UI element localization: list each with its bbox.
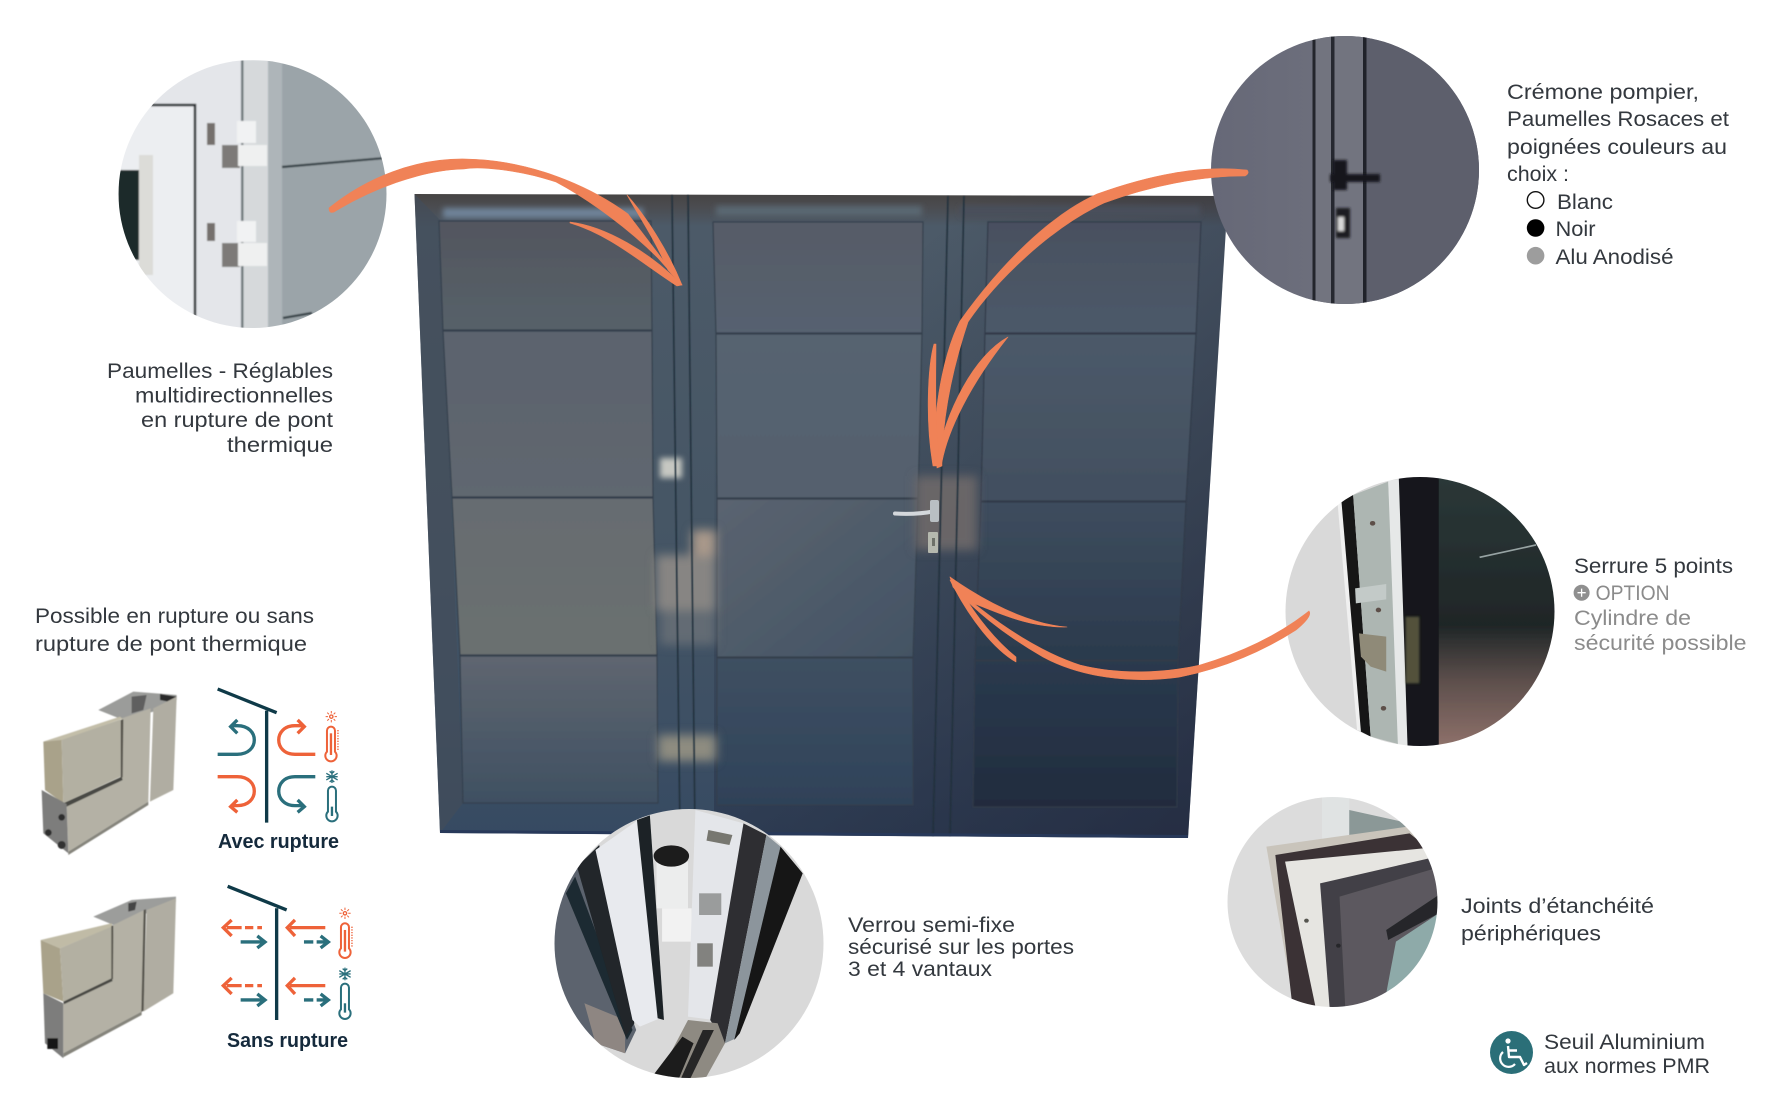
caption: threshold — [1544, 1031, 1710, 1078]
caption: crémone and colours: Alu Anodisé — [1556, 246, 1674, 269]
caption: crémone and colours — [1507, 81, 1729, 269]
caption: threshold: aux normes PMR — [1544, 1055, 1710, 1078]
caption: seals: Joints d’étanchéité — [1461, 895, 1654, 918]
caption: seals — [1461, 895, 1654, 946]
label: Sans rupture: Sans rupture — [227, 1030, 348, 1052]
caption: hinges — [107, 360, 333, 457]
swatch: black — [1527, 219, 1544, 237]
caption: lock and option: sécurité possible — [1574, 632, 1746, 655]
thermal diagram: without break — [223, 886, 352, 1020]
heat transfer arrows: bottom row — [223, 978, 328, 1006]
stile dividing lines — [672, 195, 964, 836]
caption: hinges: thermique — [227, 434, 333, 457]
caption: semi-fixed bolt — [848, 914, 1074, 981]
caption: threshold: Seuil Aluminium — [1544, 1031, 1705, 1054]
icon: option plus — [1574, 585, 1590, 601]
heading: thermal break — [35, 605, 314, 656]
door bottom edge — [440, 830, 1188, 838]
photo circle: five-point lock — [1281, 473, 1559, 750]
thermal diagram: with break — [218, 689, 338, 823]
icon: accessibility wheelchair — [1490, 1031, 1533, 1074]
caption: crémone and colours: Blanc — [1557, 191, 1613, 214]
caption: hinges: multidirectionnelles — [135, 384, 333, 408]
door handle — [895, 500, 939, 553]
caption: semi-fixed bolt: 3 et 4 vantaux — [848, 958, 993, 981]
stile reflections — [656, 476, 977, 761]
caption: semi-fixed bolt: sécurisé sur les portes — [848, 936, 1074, 959]
profile cutaway: without thermal break — [41, 897, 176, 1058]
thermometer: cold — [326, 770, 338, 821]
swatch: anodised aluminium — [1527, 247, 1544, 264]
caption: crémone and colours: Paumelles Rosaces et — [1507, 108, 1729, 131]
photo circle: crémone and handle — [1210, 36, 1480, 306]
caption: hinges: Paumelles - Réglables — [107, 360, 333, 383]
wall and roof — [218, 689, 277, 823]
caption: crémone and colours: choix : — [1507, 163, 1569, 186]
label: Avec rupture: Avec rupture — [218, 831, 339, 853]
caption: crémone and colours: poignées couleurs au — [1507, 136, 1727, 159]
caption: crémone and colours: Crémone pompier, — [1507, 81, 1699, 104]
door frame — [414, 194, 1228, 838]
photo circle: perimeter seals — [1227, 795, 1439, 1010]
heading: thermal break: Possible en rupture ou sans — [35, 605, 314, 628]
heat transfer arrows: top row — [223, 920, 328, 948]
thermometer: cold — [339, 968, 351, 1019]
heading: thermal break: rupture de pont thermique — [35, 633, 307, 656]
caption: lock and option: OPTION — [1596, 582, 1670, 605]
swatch: white — [1527, 192, 1544, 208]
left leaf panels — [439, 221, 658, 803]
caption: lock and option — [1574, 555, 1746, 655]
photo circle: hinges — [118, 60, 390, 332]
heat flow arrows — [218, 720, 315, 812]
caption: lock and option: Cylindre de — [1574, 607, 1691, 630]
photo circle: semi-fixed bolt — [551, 807, 829, 1083]
caption: semi-fixed bolt: Verrou semi-fixe — [848, 914, 1015, 937]
door photo — [414, 194, 1228, 838]
right leaf panels — [973, 222, 1201, 807]
centre leaf panels — [713, 222, 923, 805]
door right-side shading — [714, 195, 1228, 838]
thermometer: hot — [325, 711, 338, 761]
caption: crémone and colours: Noir — [1556, 218, 1596, 241]
left frame shading — [414, 194, 463, 833]
arrow: serrure callout to door — [950, 577, 1310, 680]
arrow: hinge callout to door — [329, 159, 682, 286]
caption: seals: périphériques — [1461, 922, 1601, 946]
arrow: crémone callout to door — [928, 169, 1248, 468]
caption: hinges: en rupture de pont — [141, 409, 333, 432]
wall and roof — [228, 886, 287, 1020]
top reflection strips — [443, 206, 1200, 218]
thermometer: hot — [339, 908, 352, 958]
profile cutaway: with thermal break — [42, 692, 177, 855]
stile highlight — [660, 458, 682, 478]
caption: lock and option: Serrure 5 points — [1574, 555, 1733, 578]
